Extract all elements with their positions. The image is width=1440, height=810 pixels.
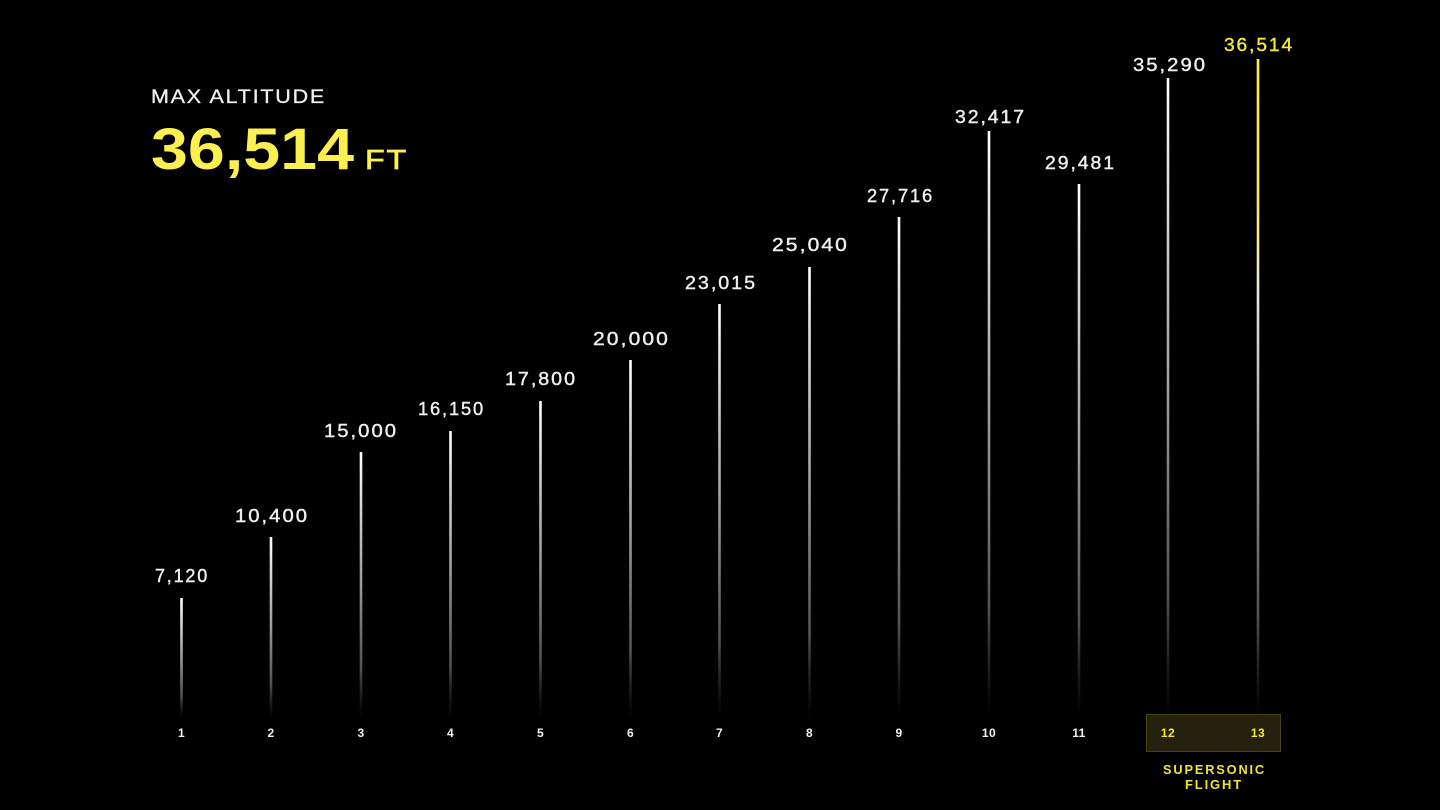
bar 10: 10	[982, 726, 996, 740]
bar 9: 9	[895, 726, 903, 740]
heading: max altitude	[151, 86, 408, 182]
bar 5: 5	[537, 726, 544, 740]
bar 5	[505, 369, 577, 740]
bar 11: 29,481	[1045, 153, 1116, 173]
bar 7: 7	[716, 726, 723, 740]
bar 4	[418, 399, 485, 740]
bar 9	[867, 186, 934, 740]
supersonic flight highlight box	[1146, 714, 1280, 752]
bar 11	[1045, 153, 1116, 740]
bar 12: 35,290	[1133, 55, 1207, 75]
bar 10: 32,417	[955, 107, 1026, 127]
bar 6: 6	[627, 726, 634, 740]
bar 6	[593, 329, 670, 740]
bar 4: 16,150	[418, 399, 485, 419]
headline value: 36,514	[151, 117, 354, 182]
bar 8	[772, 235, 849, 740]
bar 13: 36,514	[1224, 35, 1294, 55]
bar chart: altitude by flight	[155, 35, 1294, 740]
bar 13	[1224, 35, 1294, 740]
bar 9: 27,716	[867, 186, 934, 206]
bar 2: 2	[267, 726, 275, 740]
bar 13: 13	[1251, 726, 1265, 740]
bar 12: 12	[1161, 726, 1175, 740]
bar 12	[1133, 55, 1207, 740]
bar 2: 10,400	[235, 506, 309, 526]
bar 3	[324, 421, 398, 740]
supersonic flight label: SUPERSONIC	[1163, 763, 1266, 777]
bar 4: 4	[447, 726, 454, 740]
supersonic flight label	[1163, 763, 1266, 792]
headline unit: FT	[365, 144, 408, 175]
bar 7: 23,015	[685, 273, 757, 293]
bar 11: 11	[1072, 726, 1086, 740]
bar 10	[955, 107, 1026, 740]
bar 6: 20,000	[593, 329, 670, 349]
bar 3: 3	[357, 726, 365, 740]
bar 8: 25,040	[772, 235, 849, 255]
bar 1: 7,120	[155, 566, 209, 586]
supersonic flight label: FLIGHT	[1185, 778, 1243, 792]
bar 7	[685, 273, 757, 740]
bar 1	[155, 566, 209, 740]
bar 1: 1	[178, 726, 185, 740]
heading label: MAX ALTITUDE	[151, 86, 326, 108]
bar 8: 8	[806, 726, 813, 740]
bar 3: 15,000	[324, 421, 398, 441]
bar 5: 17,800	[505, 369, 577, 389]
bar 2	[235, 506, 309, 740]
